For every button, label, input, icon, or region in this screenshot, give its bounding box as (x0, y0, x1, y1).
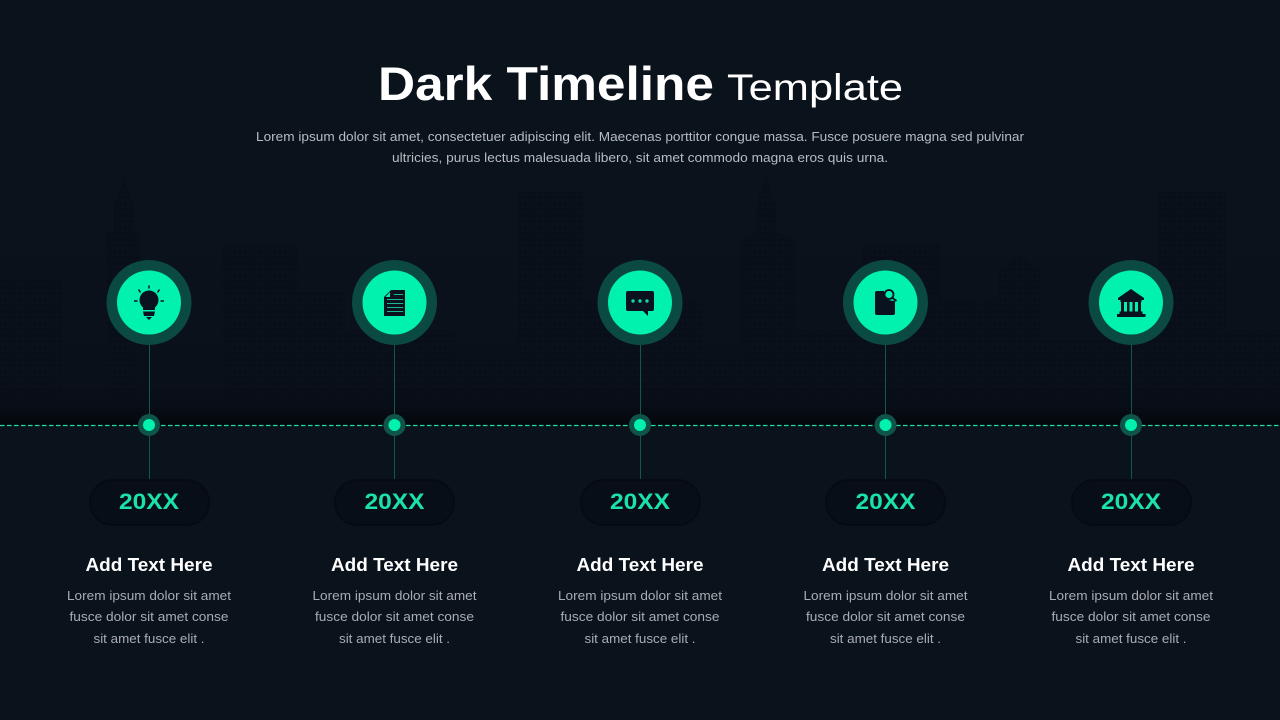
timeline dot 5 (1120, 414, 1142, 436)
icon: document (384, 290, 405, 316)
timeline item 3 (558, 260, 723, 646)
year pill 2 (335, 480, 454, 525)
item 5 body text: fusce dolor sit amet conse (1052, 610, 1211, 624)
title: Dark Timeline (378, 57, 714, 110)
timeline dot 1 (138, 414, 160, 436)
item 1 body text (67, 589, 232, 646)
timeline dot 2 (384, 414, 406, 436)
item 2 body text: fusce dolor sit amet conse (315, 610, 474, 624)
item 1 heading: Add Text Here (86, 555, 212, 575)
icon circle 3 (598, 260, 682, 345)
timeline item 1 (67, 260, 232, 646)
title: Template (727, 67, 903, 108)
item 4 body text: sit amet fusce elit . (830, 632, 941, 646)
item 2 body text (312, 589, 477, 646)
city skyline silhouette (0, 178, 1280, 425)
item 3 body text: sit amet fusce elit . (584, 632, 696, 646)
year pill 3 (581, 480, 700, 525)
item 4 body text (804, 589, 968, 646)
icon: speech bubble (626, 291, 654, 316)
icon: bank building (1117, 289, 1146, 317)
timeline item 4 (804, 260, 968, 646)
item 2 body text: sit amet fusce elit . (339, 632, 450, 646)
item 3 body text (558, 589, 723, 646)
item 5 heading: Add Text Here (1068, 555, 1194, 575)
title (378, 57, 903, 110)
icon: file search (875, 290, 896, 315)
timeline item 5 (1049, 260, 1214, 646)
item 1 body text: Lorem ipsum dolor sit amet (67, 589, 232, 603)
item 1 body text: fusce dolor sit amet conse (70, 610, 229, 624)
item 2 body text: Lorem ipsum dolor sit amet (312, 589, 477, 603)
timeline dot 4 (874, 414, 896, 436)
subtitle text block (256, 130, 1024, 165)
item 3 body text: fusce dolor sit amet conse (560, 610, 720, 624)
year pill 1: 20XX (119, 489, 179, 514)
item 4 body text: Lorem ipsum dolor sit amet (804, 589, 968, 603)
year pill 4 (826, 480, 945, 525)
year pill 3: 20XX (610, 489, 670, 514)
year pill 5: 20XX (1101, 489, 1161, 514)
item 5 body text (1049, 589, 1214, 646)
icon circle 5 (1088, 260, 1174, 345)
item 4 body text: fusce dolor sit amet conse (806, 610, 965, 624)
timeline item 2 (312, 260, 477, 646)
subtitle text block: Lorem ipsum dolor sit amet, consectetuer adipiscing elit. Maecenas porttitor congue massa. Fusce posuere magna sed pulvinar (256, 130, 1024, 144)
timeline dot 3 (629, 414, 651, 436)
year pill 1 (90, 480, 209, 525)
icon: light bulb (134, 286, 164, 320)
item 3 heading: Add Text Here (576, 555, 704, 575)
item 3 body text: Lorem ipsum dolor sit amet (558, 589, 723, 603)
item 1 body text: sit amet fusce elit . (94, 632, 204, 646)
year pill 4: 20XX (856, 489, 916, 514)
item 2 heading: Add Text Here (331, 555, 458, 575)
icon circle 2 (352, 260, 437, 345)
year pill 2: 20XX (364, 489, 425, 514)
year pill 5 (1072, 480, 1191, 525)
item 5 body text: sit amet fusce elit . (1076, 632, 1186, 646)
item 4 heading: Add Text Here (822, 555, 949, 575)
item 5 body text: Lorem ipsum dolor sit amet (1049, 589, 1214, 603)
timeline dashed line (0, 424, 1280, 426)
subtitle text block: ultricies, purus lectus malesuada libero, sit amet commodo magna eros quis urna. (392, 151, 888, 165)
icon circle 1 (106, 260, 192, 345)
icon circle 4 (843, 260, 928, 345)
